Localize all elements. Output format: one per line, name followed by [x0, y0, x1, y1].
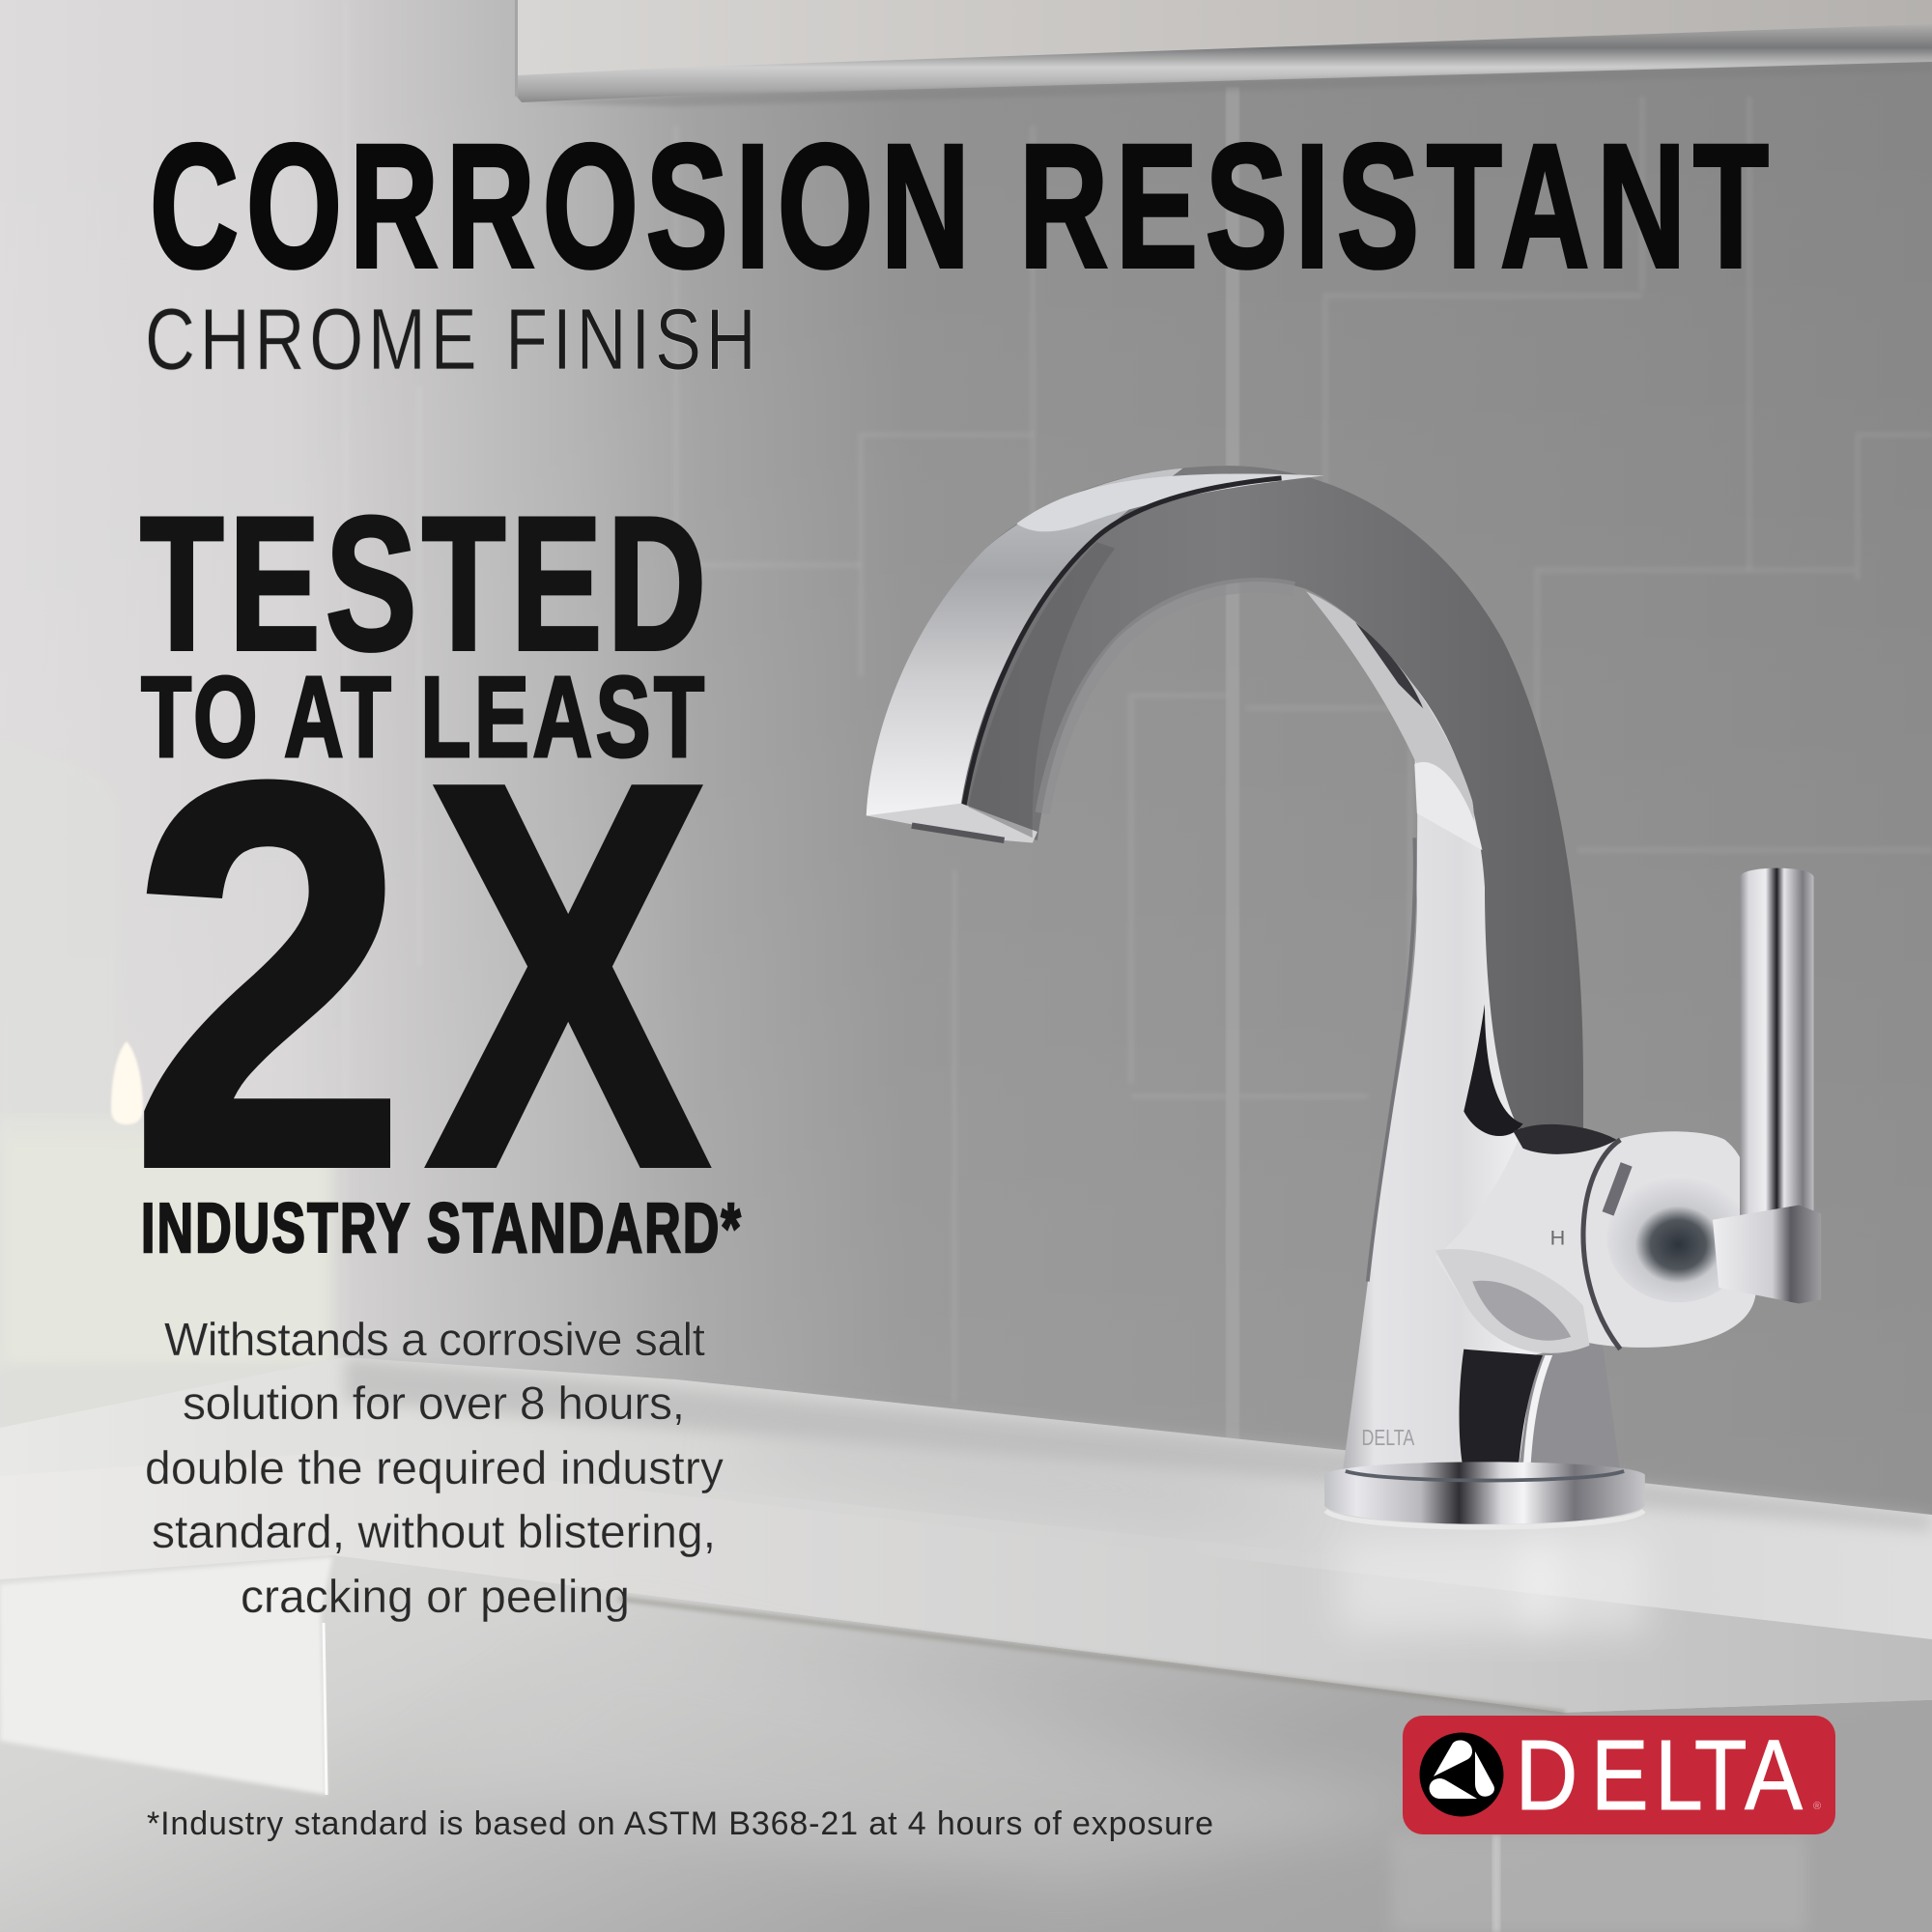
neck dark reflection: [1463, 1005, 1523, 1136]
icon: delta triangle drops: [1430, 1741, 1494, 1799]
logo wordmark: DELTA: [1516, 1720, 1803, 1831]
lever block: [1713, 1205, 1821, 1303]
title: CORROSION RESISTANT: [150, 109, 1769, 304]
mirror with chrome frame: [515, 0, 1932, 106]
hot mark: H: [1550, 1225, 1565, 1249]
base ring: [1324, 1462, 1645, 1527]
neck reflection: [1306, 591, 1474, 836]
headline: tested to at least 2X: TO AT LEAST: [141, 652, 704, 781]
logo: Delta: [1403, 1716, 1835, 1834]
glass candle holder: [0, 739, 333, 1429]
icon: candle flame: [111, 1041, 143, 1124]
footnote: *Industry standard is based on ASTM B368-21 at 4 hours of exposure: [147, 1805, 1213, 1842]
spout inner edge sheen: [1042, 585, 1293, 813]
chrome faucet: [867, 466, 1821, 1527]
housing top dark: [1513, 1124, 1616, 1154]
headline: tested to at least 2X: INDUSTRY STANDARD*: [141, 1190, 741, 1267]
faucet reflection on counter: [1338, 1536, 1647, 1633]
headline: tested to at least 2X: [130, 478, 741, 1280]
housing seam: [1583, 1140, 1620, 1350]
subtitle: CHROME FINISH: [145, 291, 756, 388]
spout top highlight: [1016, 473, 1324, 531]
headline: tested to at least 2X: TESTED: [140, 478, 706, 690]
faucet neck and body: [1343, 653, 1605, 1472]
body copy: solution for over 8 hours,: [183, 1378, 685, 1430]
base stem: [1460, 1337, 1620, 1472]
spout bright front: [867, 469, 1182, 823]
handle housing: [1435, 1127, 1756, 1350]
headline: tested to at least 2X: 2: [130, 671, 407, 1280]
housing lower lip: [1435, 1249, 1589, 1353]
counter front lip: [0, 1454, 1932, 1713]
housing dome: [1606, 1175, 1749, 1302]
headline: tested to at least 2X: X: [426, 670, 712, 1280]
body copy: standard, without blistering,: [152, 1507, 716, 1558]
sink basin: [0, 1555, 1932, 1932]
faucet spout: [867, 466, 1583, 1146]
body copy: cracking or peeling: [241, 1572, 630, 1623]
spout dark band: [963, 478, 1282, 809]
front edge line: [1368, 838, 1415, 1282]
spout tip: [867, 804, 1037, 842]
body copy: double the required industry: [145, 1443, 724, 1494]
body copy: [145, 1315, 724, 1623]
body copy: Withstands a corrosive salt: [164, 1315, 705, 1366]
counter top: [0, 1357, 1932, 1642]
lever handle: [1740, 868, 1814, 1233]
registered mark: ®: [1813, 1801, 1821, 1812]
spout inner face: [969, 542, 1115, 838]
brand mark on faucet: DELTA: [1361, 1425, 1415, 1450]
